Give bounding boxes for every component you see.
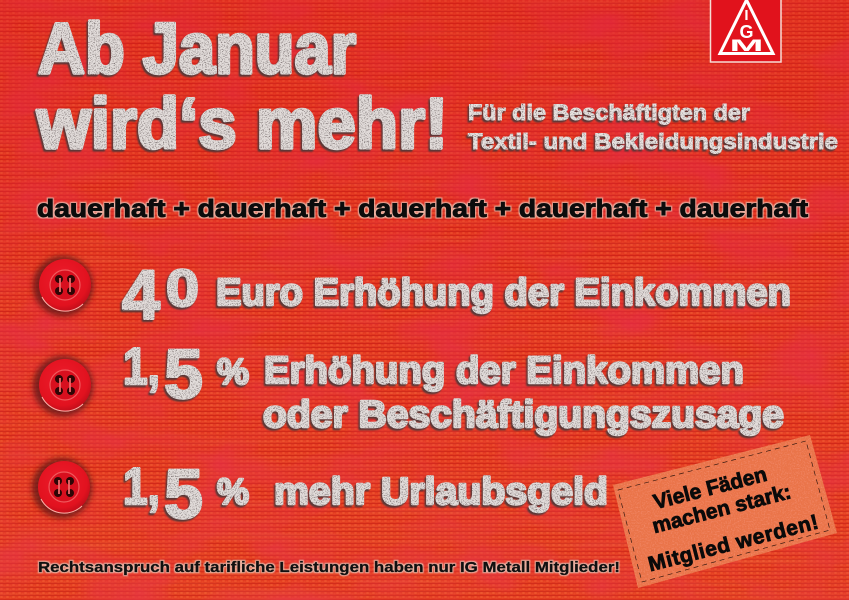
subtitle: Für die Beschäftigten der [468,100,750,125]
subtitle [468,100,838,154]
item 2: 1,5 % Erhöhung: Erhöhung der Einkommen [264,350,744,392]
item 3: 1,5 % Urlaubsgeld: % [217,471,249,512]
item 2: 1,5 % Erhöhung: oder Beschäftigungszusage [263,394,784,436]
title [36,10,448,164]
callout: patch [613,435,837,588]
item 1: 40 Euro: 4 [122,256,160,334]
footnote: Rechtsanspruch auf tarifliche Leistungen haben nur IG Metall Mitglieder! [38,559,620,576]
item 2: 1,5 % Erhöhung: % [217,351,249,392]
tagline: dauerhaft: dauerhaft + dauerhaft + dauerhaft + dauerhaft + dauerhaft [37,195,809,223]
icon: button 1 [33,256,93,316]
title: wird‘s mehr! [36,85,448,164]
icon: button 2 [33,356,93,416]
logo: IG Metall [710,0,781,62]
callout: patch: machen stark: [650,480,794,538]
item 3: 1,5 % Urlaubsgeld: mehr Urlaubsgeld [274,471,608,513]
logo: IG Metall: M [730,36,764,55]
item 3: 1,5 % Urlaubsgeld [123,455,608,533]
callout: patch: Viele Fäden [651,463,769,514]
logo: IG Metall: G [739,22,754,42]
item 3: 1,5 % Urlaubsgeld: 1, [123,458,160,516]
title: Ab Januar [38,10,356,89]
icon: button 3 [32,458,92,518]
item 2: 1,5 % Erhöhung: 5 [164,335,203,413]
item 1: 40 Euro [122,256,791,334]
subtitle: Textil- und Bekleidungsindustrie [468,129,838,154]
item 1: 40 Euro: 0 [166,260,199,318]
item 1: 40 Euro: Euro Erhöhung der Einkommen [216,272,791,314]
item 3: 1,5 % Urlaubsgeld: 5 [164,455,203,533]
item 2: 1,5 % Erhöhung [123,335,784,436]
callout: patch: Mitglied werden! [646,510,821,576]
logo: IG Metall: I [744,7,749,24]
item 2: 1,5 % Erhöhung: 1, [123,338,160,396]
